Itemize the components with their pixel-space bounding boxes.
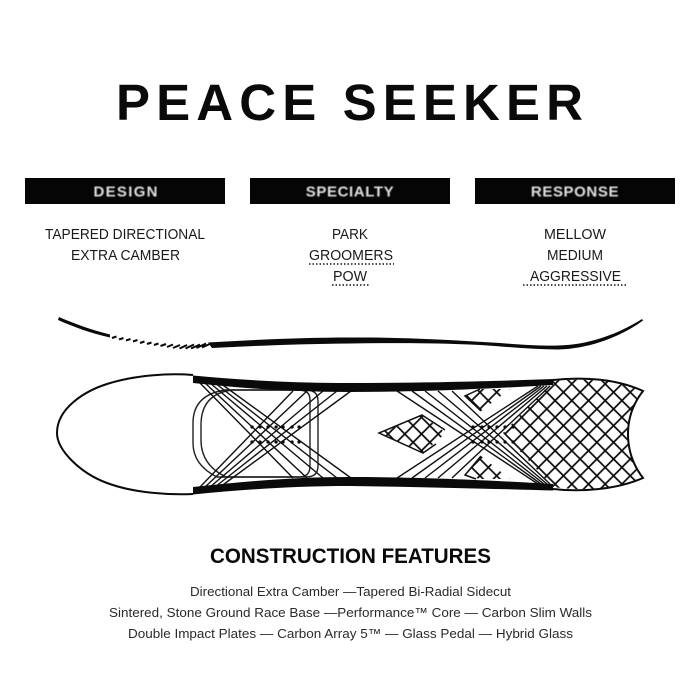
construction features list: Double Impact Plates — Carbon Array 5™ — Glass Pedal — Hybrid Glass (128, 626, 574, 641)
lower edge bar (193, 477, 553, 494)
design values: TAPERED DIRECTIONAL (45, 227, 205, 243)
upper small grid (465, 389, 510, 411)
board top view (57, 374, 643, 494)
specialty values (309, 227, 394, 285)
specialty values: POW (333, 269, 367, 285)
nose outline (57, 374, 193, 494)
design values: EXTRA CAMBER (71, 248, 180, 264)
tail outline (553, 379, 643, 490)
heading bar: specialty: SPECIALTY (306, 184, 394, 200)
heading bar: specialty (250, 178, 450, 204)
construction features list: Directional Extra Camber —Tapered Bi-Radial Sidecut (190, 584, 511, 599)
panel: design (25, 178, 225, 264)
binding insert rounded frames (193, 390, 318, 477)
panel: response (475, 178, 675, 285)
response values: AGGRESSIVE (530, 269, 621, 285)
response values: MEDIUM (547, 248, 603, 264)
construction features heading: CONSTRUCTION FEATURES (210, 545, 491, 568)
heading bar: response: RESPONSE (531, 184, 619, 200)
panel: specialty (250, 178, 450, 285)
center kite grid (379, 415, 446, 453)
response values: MELLOW (544, 227, 606, 243)
construction features list (109, 584, 593, 641)
board side profile (58, 317, 643, 350)
specialty values: PARK (332, 227, 368, 243)
specialty values: GROOMERS (309, 248, 393, 264)
tail grid fill (503, 380, 642, 489)
crossing lines (200, 383, 550, 487)
heading bar: response (475, 178, 675, 204)
response values (523, 227, 626, 285)
title: PEACE SEEKER (116, 74, 583, 131)
lower small grid (465, 456, 510, 479)
insert dots (252, 427, 513, 442)
design values (45, 227, 205, 264)
heading bar: design (25, 178, 225, 204)
upper edge bar (193, 376, 553, 392)
construction features list: Sintered, Stone Ground Race Base —Performance™ Core — Carbon Slim Walls (109, 605, 593, 620)
heading bar: design: DESIGN (94, 184, 158, 200)
